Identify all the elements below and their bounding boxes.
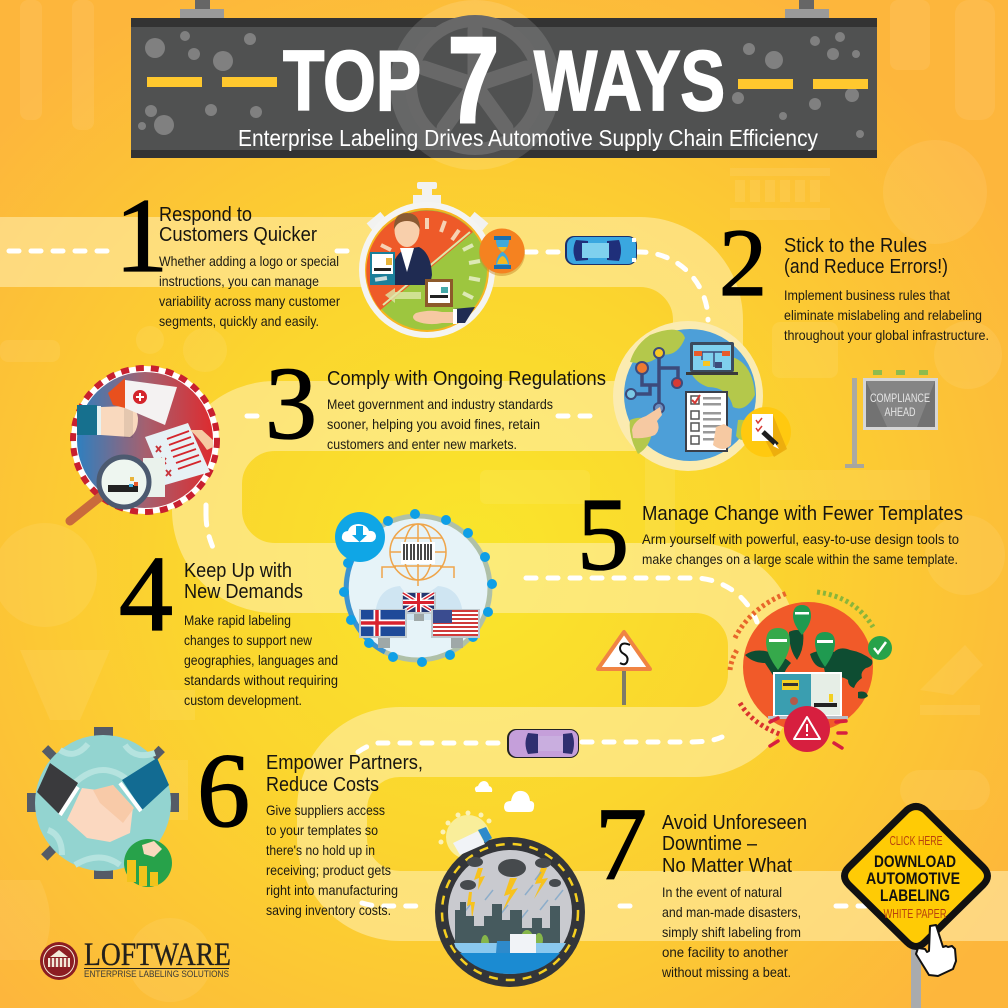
wheel — [398, 8, 552, 162]
body 1: variability across many customer — [159, 293, 340, 309]
laptop — [768, 672, 848, 719]
label card right — [425, 279, 453, 307]
list sheet — [145, 423, 210, 485]
gear teeth — [27, 727, 179, 879]
icon: storm city — [435, 781, 585, 987]
road stripes — [147, 77, 868, 89]
number 3: 3 — [265, 346, 317, 461]
body 1: Whether adding a logo or special — [159, 253, 339, 269]
laptop — [686, 342, 738, 375]
logo tagline: ENTERPRISE LABELING SOLUTIONS — [84, 969, 229, 979]
network nodes — [631, 358, 678, 403]
heading 6: Reduce Costs — [266, 773, 379, 796]
road — [0, 252, 1008, 906]
number 1: 1 — [115, 177, 168, 294]
sign text: WHITE PAPER — [884, 906, 946, 921]
step 7 text — [595, 787, 807, 980]
body 7: simply shift labeling from — [662, 924, 801, 940]
number 5: 5 — [577, 477, 629, 592]
storm clouds and lightning — [460, 857, 561, 919]
magnifier — [70, 457, 165, 521]
icon: purple car — [507, 729, 579, 758]
compliance sign: AHEAD — [884, 405, 916, 419]
continents — [745, 630, 872, 699]
headline: WAYS — [534, 34, 725, 129]
sleeve and hand — [77, 405, 138, 438]
body 4: standards without requiring — [184, 672, 338, 688]
businessman — [390, 213, 432, 285]
tick marks — [381, 218, 459, 250]
check badge — [868, 636, 892, 660]
logo rule — [84, 968, 229, 969]
body 7: and man-made disasters, — [662, 904, 801, 920]
body 6: saving inventory costs. — [266, 902, 391, 918]
banner panel — [131, 18, 877, 158]
compliance sign: COMPLIANCE — [870, 391, 930, 405]
body 6: receiving; product gets — [266, 862, 391, 878]
body 3 — [327, 396, 553, 452]
icon: megaphone and magnifier — [70, 366, 219, 521]
body 5: make changes on a large scale within the same template. — [642, 551, 958, 567]
clipboard — [685, 391, 728, 452]
road ring — [435, 837, 585, 987]
step 6 text — [197, 732, 423, 918]
icon: pencil badge — [741, 407, 791, 457]
water — [454, 943, 566, 953]
heading 1: Respond to — [159, 203, 252, 226]
heading 7: Downtime – — [662, 832, 758, 855]
body 1: instructions, you can manage — [159, 273, 319, 289]
heading 1 — [159, 203, 317, 246]
heading 7: No Matter What — [662, 854, 792, 877]
Loftware logo — [40, 937, 231, 980]
barcode — [401, 542, 435, 564]
icon: handshake — [27, 727, 179, 887]
truck on sun — [453, 827, 492, 855]
sign text: LABELING — [880, 886, 950, 905]
title banner — [131, 0, 877, 162]
monitor: UK flag — [402, 592, 436, 621]
heading 7: Avoid Unforeseen — [662, 811, 807, 834]
banner mounts — [180, 0, 829, 18]
body 7: without missing a beat. — [661, 964, 791, 980]
step 2 text — [719, 209, 989, 343]
arrow — [385, 288, 421, 303]
icon: globe with checklist — [613, 321, 763, 471]
icon: hand cursor — [916, 925, 956, 976]
coin badge — [124, 839, 172, 887]
warning badge — [770, 706, 846, 752]
heading 7 — [662, 811, 807, 877]
heading 2: (and Reduce Errors!) — [784, 255, 948, 278]
trees — [481, 930, 543, 951]
body 4 — [184, 612, 338, 708]
hand — [413, 307, 475, 324]
wire globe — [382, 524, 454, 586]
heading 4: New Demands — [184, 580, 303, 603]
body 4: geographies, languages and — [184, 652, 338, 668]
road sign: S curve — [598, 632, 650, 705]
compliance sign — [845, 370, 938, 468]
skyline — [455, 902, 560, 948]
monitor: Iceland flag — [359, 609, 407, 648]
step 4 text — [119, 535, 338, 708]
sleeves — [37, 763, 78, 815]
body 6 — [266, 802, 398, 918]
body 5 — [642, 531, 959, 567]
icon: hourglass badge — [479, 228, 525, 276]
rain — [462, 872, 563, 925]
headline: TOP — [283, 34, 421, 129]
label card left — [370, 252, 395, 285]
pins — [766, 605, 835, 670]
sign text: AUTOMOTIVE — [866, 869, 960, 888]
cloud badge — [335, 512, 385, 562]
subtitle: Enterprise Labeling Drives Automotive Supply Chain Efficiency — [238, 125, 818, 151]
chevron arcs — [730, 592, 873, 735]
body 7: In the event of natural — [662, 884, 782, 900]
body 6: Give suppliers access — [266, 802, 385, 818]
number 6: 6 — [197, 732, 250, 849]
heading 6 — [266, 751, 423, 796]
sign pole — [911, 945, 921, 1008]
icon: stopwatch — [359, 182, 495, 338]
body 3: Meet government and industry standards — [327, 396, 553, 412]
number 4: 4 — [119, 535, 173, 654]
download sign — [844, 806, 988, 1008]
logo wordmark: LOFTWARE — [84, 937, 231, 973]
body 2: throughout your global infrastructure. — [784, 327, 989, 343]
body 7: one facility to another — [662, 944, 788, 960]
sign text: CLICK HERE — [890, 833, 943, 848]
body 2 — [784, 287, 989, 343]
body 6: right into manufacturing — [266, 882, 398, 898]
body 1: segments, quickly and easily. — [159, 313, 319, 329]
road dashes — [9, 251, 866, 906]
heading 4 — [184, 559, 303, 603]
heading 5: Manage Change with Fewer Templates — [642, 502, 963, 525]
sign diamond — [844, 806, 988, 946]
body 6: there's no hold up in — [266, 842, 375, 858]
icon: blue car — [565, 236, 637, 265]
body 3: customers and enter new markets. — [327, 436, 517, 452]
flood truck — [496, 934, 536, 953]
dots ring — [339, 509, 497, 667]
number 2: 2 — [719, 209, 767, 316]
logo emblem — [40, 942, 78, 980]
headline: 7 — [448, 12, 499, 148]
gravel dots — [138, 31, 864, 138]
sign text: DOWNLOAD — [874, 852, 956, 871]
hands — [67, 785, 133, 842]
number 7: 7 — [595, 787, 647, 902]
sign text — [866, 833, 960, 921]
body 4: custom development. — [184, 692, 302, 708]
headline — [283, 12, 725, 148]
heading 6: Empower Partners, — [266, 751, 423, 774]
body 2: Implement business rules that — [784, 287, 950, 303]
step 5 text — [577, 477, 963, 592]
body 1 — [159, 253, 340, 329]
megaphone — [108, 378, 177, 425]
body 6: to your templates so — [266, 822, 378, 838]
monitor: US flag — [431, 609, 480, 648]
body 7 — [661, 884, 801, 980]
icon: global labels — [335, 509, 497, 667]
step 1 text — [115, 177, 340, 329]
sun and clouds — [438, 781, 534, 859]
heading 3: Comply with Ongoing Regulations — [327, 367, 606, 390]
body 4: changes to support new — [184, 632, 313, 648]
step 3 text — [265, 346, 606, 461]
icon: world warning — [730, 592, 892, 752]
body 3: sooner, helping you avoid fines, retain — [327, 416, 540, 432]
land — [630, 330, 755, 454]
body 5: Arm yourself with powerful, easy-to-use design tools to — [642, 531, 959, 547]
pointing hand — [632, 407, 662, 438]
heading 4: Keep Up with — [184, 559, 292, 582]
heading 1: Customers Quicker — [159, 223, 317, 246]
body 4: Make rapid labeling — [184, 612, 291, 628]
heading 2 — [784, 234, 948, 278]
body 2: eliminate mislabeling and relabeling — [784, 307, 982, 323]
heading 2: Stick to the Rules — [784, 234, 927, 257]
